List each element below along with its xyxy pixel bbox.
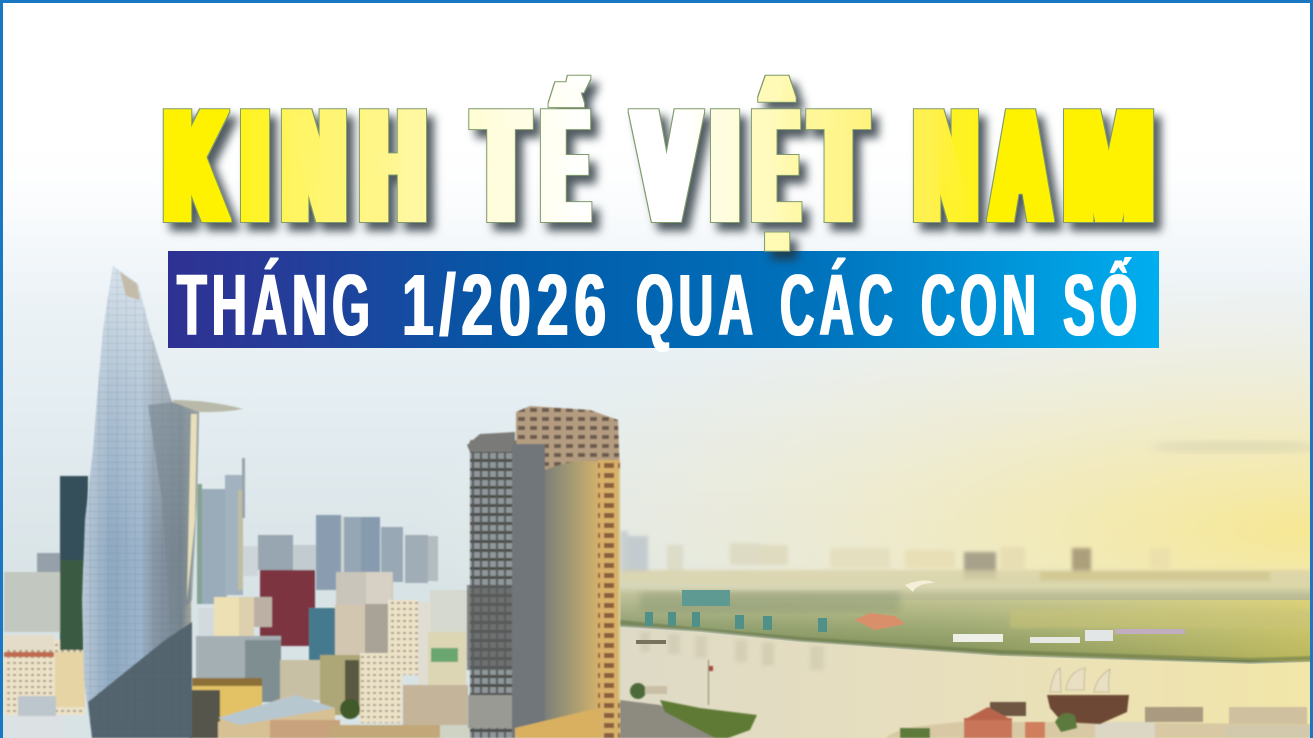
title: T: [476, 76, 526, 256]
subtitle text: CON: [921, 257, 1041, 354]
title: H: [362, 76, 424, 256]
subtitle text: SỐ: [1063, 257, 1142, 354]
near bank buildings right: [885, 702, 1313, 738]
river: [430, 590, 1313, 738]
Bitexco tower: [82, 266, 243, 738]
Saigon One tower: [467, 406, 620, 738]
title: T: [813, 76, 864, 256]
subtitle text: QUA: [636, 257, 758, 354]
title: N: [916, 76, 976, 256]
title: A: [993, 76, 1048, 256]
title: I: [713, 76, 737, 256]
title: Ệ: [756, 76, 796, 256]
title: N: [284, 76, 344, 256]
subtitle bar: [168, 251, 1159, 354]
title: Ế: [545, 76, 586, 256]
title: [166, 76, 1152, 256]
subtitle text: 1/2026: [402, 257, 612, 354]
far bank land: [620, 572, 1313, 664]
subtitle text: THÁNG: [177, 257, 375, 354]
waterfront park and road: [620, 660, 757, 738]
subtitle text: [177, 257, 1142, 354]
subtitle text: CÁC: [780, 257, 898, 354]
distant skyline: [620, 531, 1313, 584]
title: K: [166, 76, 224, 256]
junk ship: [1047, 668, 1129, 732]
title: M: [1065, 76, 1152, 256]
mid-distance city blocks: [4, 458, 470, 738]
title: I: [243, 76, 267, 256]
title: V: [636, 76, 697, 256]
